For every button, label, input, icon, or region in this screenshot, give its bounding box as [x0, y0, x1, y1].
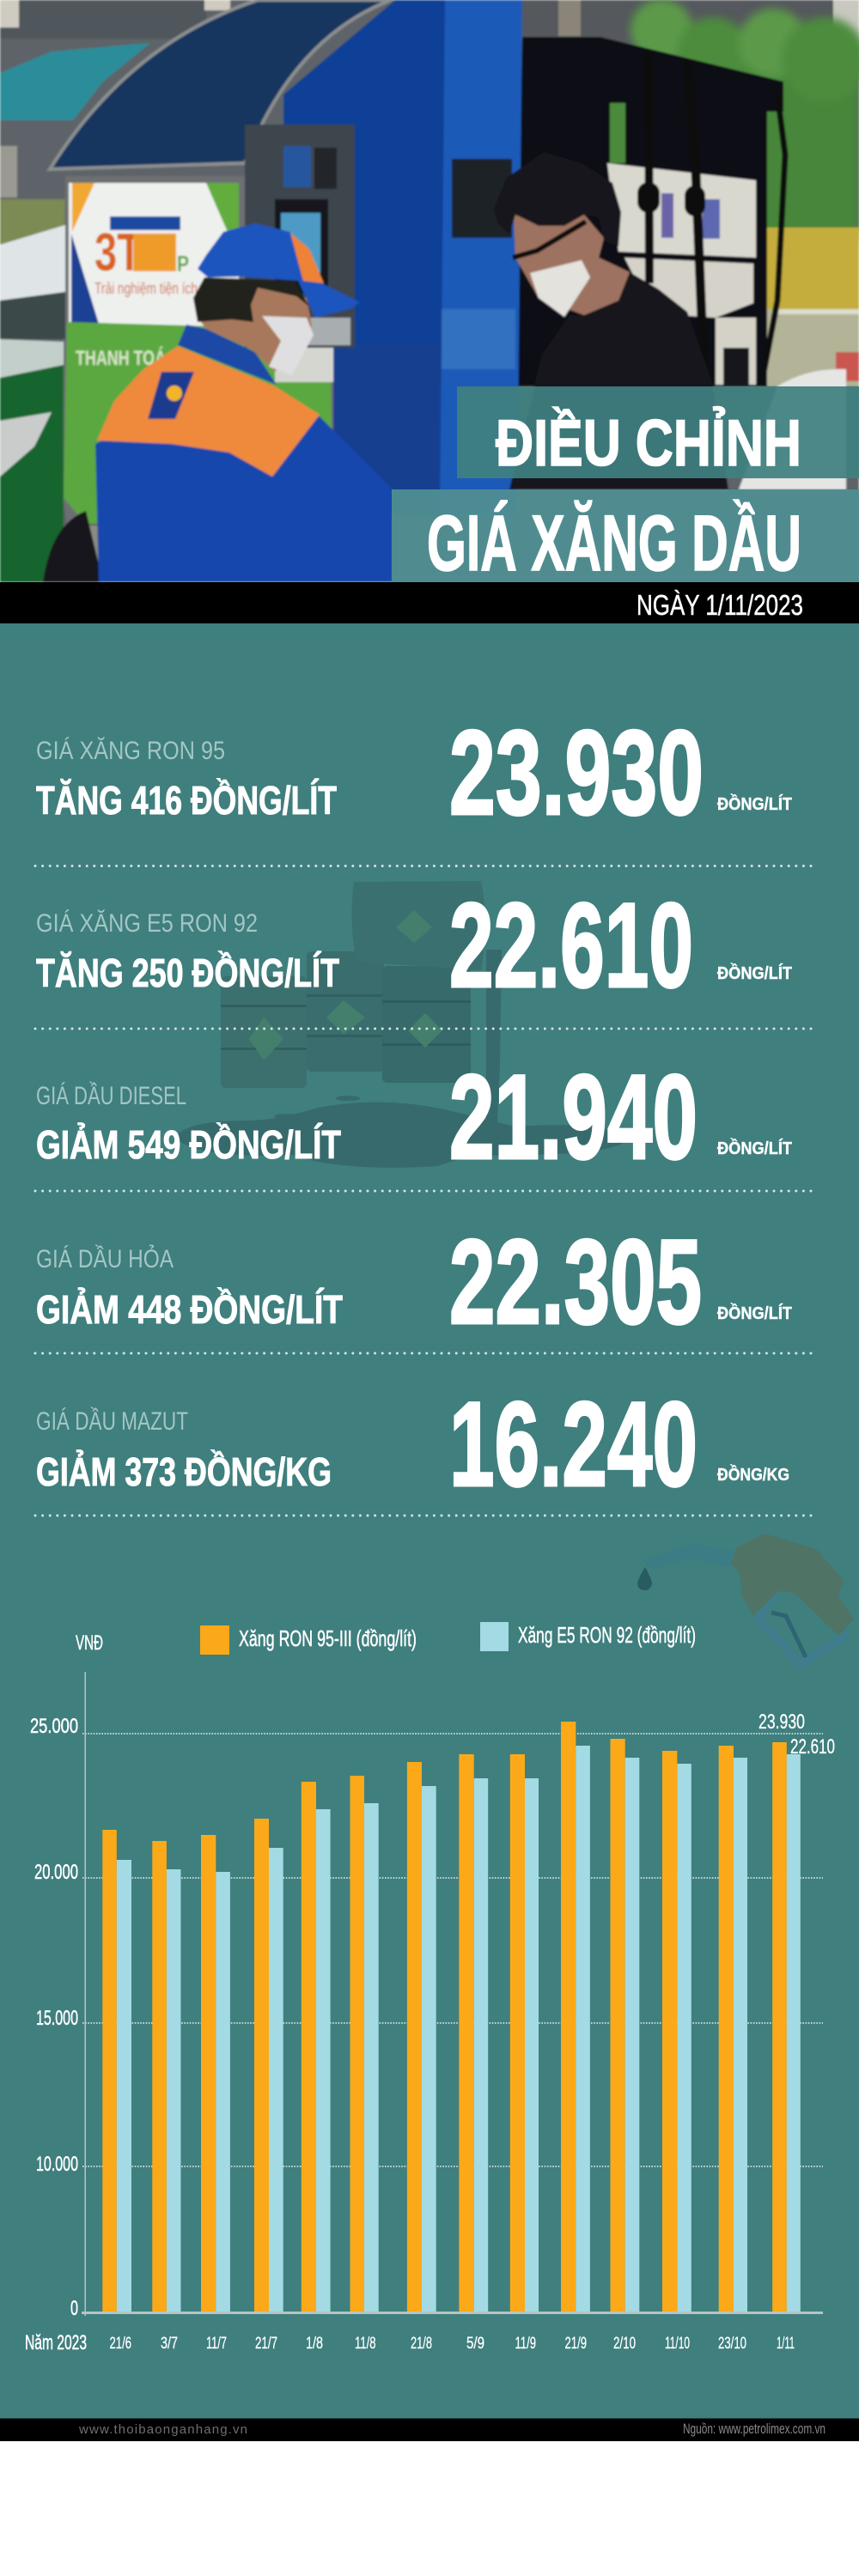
kiosk base — [88, 525, 100, 562]
oil stream — [486, 950, 502, 1142]
date text: NGÀY 1/11/2023 — [637, 589, 803, 621]
x axis date labels: 11/8 — [355, 2335, 376, 2353]
kiosk poster: P — [177, 251, 189, 276]
label: GIÁ XĂNG E5 RON 92 — [36, 909, 258, 938]
unit: ĐỒNG/KG — [717, 1464, 789, 1485]
jacket logo — [148, 372, 194, 419]
spill pool — [175, 1103, 630, 1168]
change: TĂNG 416 ĐỒNG/LÍT — [36, 778, 337, 823]
panel: page background — [0, 623, 859, 2419]
row: Mazut — [36, 1376, 789, 1511]
fuel pump white body — [607, 163, 756, 385]
blue series bars — [117, 1746, 801, 2312]
x axis date labels: 21/7 — [255, 2335, 277, 2353]
kiosk payment sign: THANH TOÁ — [76, 346, 166, 370]
nozzle spout — [643, 1544, 734, 1569]
price: 21.940 — [449, 1049, 698, 1184]
customer — [494, 152, 728, 489]
x axis date labels: 1/8 — [306, 2335, 323, 2353]
change: TĂNG 250 ĐỒNG/LÍT — [36, 951, 339, 995]
attendant mask — [262, 316, 314, 375]
legend: E5 RON 92: Xăng E5 RON 92 (đồng/lít) — [518, 1622, 696, 1648]
attendant cap — [198, 223, 360, 318]
price: 22.305 — [449, 1214, 702, 1349]
illustration: oil barrels and spill — [175, 881, 630, 1168]
unit: ĐỒNG/LÍT — [717, 1303, 792, 1323]
date band — [0, 582, 859, 623]
customer glasses — [513, 222, 586, 258]
axes — [82, 1672, 823, 2316]
orange series bars — [102, 1722, 787, 2312]
nozzle trigger guard — [758, 1591, 849, 1664]
background: tree — [612, 0, 859, 240]
price: 22.610 — [449, 878, 693, 1012]
legend: E5 RON 92 — [480, 1622, 696, 1651]
left barrel — [221, 976, 307, 1088]
background: building right — [522, 0, 832, 50]
car mirror right — [739, 369, 846, 489]
fuel hoses and nozzles — [649, 52, 785, 385]
footer website: www.thoibaonganhang.vn — [78, 2422, 247, 2437]
label: GIÁ DẦU DIESEL — [36, 1081, 186, 1110]
row: Kerosene — [36, 1214, 792, 1349]
kiosk canopy arch — [50, 0, 391, 169]
label: GIÁ XĂNG RON 95 — [36, 737, 225, 765]
nozzle trigger — [771, 1613, 806, 1657]
latest value labels: 22.610 — [790, 1735, 835, 1759]
customer face — [514, 215, 630, 315]
x axis date labels: 21/9 — [565, 2335, 587, 2353]
tipped barrel — [352, 881, 485, 970]
x axis date labels: 3/7 — [161, 2335, 178, 2353]
attendant head — [198, 281, 312, 372]
x axis date labels: 21/6 — [110, 2335, 131, 2353]
x axis date labels: 2/10 — [613, 2335, 636, 2353]
row: E5 RON 92 — [36, 878, 792, 1012]
x axis date labels: 5/9 — [466, 2335, 484, 2353]
poster slogan: Trải nghiệm tiện ích — [94, 280, 198, 297]
attendant collar — [178, 325, 277, 385]
bar chart: fuel price history — [25, 1622, 835, 2354]
title box two — [392, 489, 859, 587]
title box one — [457, 386, 859, 480]
chart unit: VNĐ — [76, 1631, 103, 1655]
customer jacket — [509, 272, 728, 489]
x axis date labels: 11/10 — [665, 2335, 690, 2353]
x axis date labels: 1/11 — [777, 2335, 795, 2353]
customer mask — [530, 260, 590, 317]
car left — [0, 225, 103, 582]
label: GIÁ DẦU HỎA — [36, 1244, 174, 1273]
legend: RON 95: Xăng RON 95-III (đồng/lít) — [239, 1625, 417, 1651]
attendant jacket — [95, 404, 393, 582]
latest value labels: 23.930 — [758, 1710, 805, 1734]
fuel pump dark frame — [515, 37, 783, 386]
payment terminal — [245, 125, 355, 382]
price: 16.240 — [449, 1376, 698, 1511]
middle barrel — [307, 951, 384, 1072]
unit: ĐỒNG/LÍT — [717, 1138, 792, 1158]
latest value labels — [758, 1710, 835, 1759]
y axis labels: 15.000 — [36, 2007, 78, 2030]
x axis year label: Năm 2023 — [25, 2331, 87, 2354]
x axis date labels: 21/8 — [411, 2335, 432, 2353]
y axis labels: 0 — [70, 2297, 78, 2320]
customer hair — [494, 152, 621, 246]
change: GIẢM 448 ĐỒNG/LÍT — [36, 1287, 343, 1332]
x axis date labels — [110, 2335, 795, 2353]
icon: fuel nozzle with drop — [637, 1534, 854, 1664]
x axis date labels: 23/10 — [718, 2335, 746, 2353]
blue pillar — [283, 0, 522, 515]
attendant — [95, 223, 393, 582]
poster logo: 3T — [94, 223, 142, 283]
price: 23.930 — [449, 705, 704, 840]
y axis labels: 20.000 — [34, 1861, 78, 1884]
unit: ĐỒNG/LÍT — [717, 963, 792, 983]
nozzle body — [731, 1534, 854, 1636]
x axis date labels: 11/9 — [515, 2335, 536, 2353]
footer band — [0, 2418, 859, 2441]
kiosk poster — [60, 176, 333, 582]
x axis date labels: 11/7 — [206, 2335, 227, 2353]
background: yellow wall and fence — [756, 228, 859, 386]
right barrel — [382, 966, 471, 1083]
background: teal canopy — [0, 43, 150, 120]
y axis labels — [30, 1715, 78, 2320]
change: GIẢM 549 ĐỒNG/LÍT — [36, 1122, 341, 1167]
change: GIẢM 373 ĐỒNG/KG — [36, 1449, 332, 1494]
unit: ĐỒNG/LÍT — [717, 793, 792, 814]
label: GIÁ DẦU MAZUT — [36, 1406, 188, 1436]
row: Diesel — [36, 1049, 792, 1184]
legend: RON 95 — [200, 1625, 417, 1655]
attendant orange shoulders — [97, 346, 320, 477]
y axis labels: 25.000 — [30, 1715, 78, 1738]
y axis labels: 10.000 — [36, 2153, 78, 2176]
fuel drop — [637, 1567, 652, 1590]
panel: hero photo of fuel station — [0, 0, 859, 582]
row: RON 95 — [36, 705, 792, 840]
